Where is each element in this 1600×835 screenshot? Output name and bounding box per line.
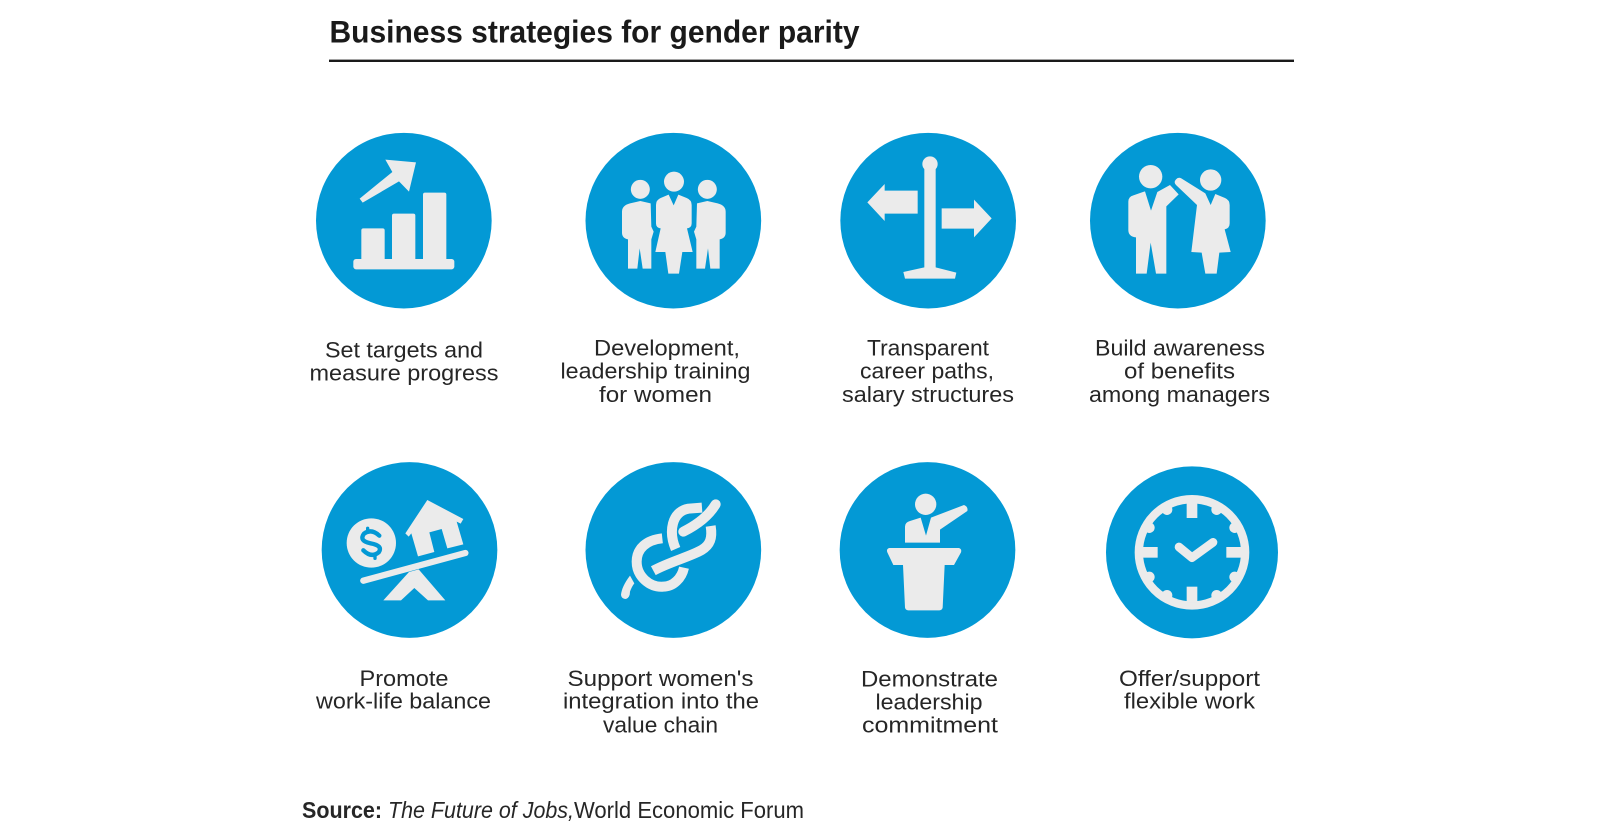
label: set targets: measure progress [310,360,498,386]
label: work-life balance: Promote [360,666,448,691]
label: work-life balance [315,666,491,714]
label: transparent career paths: Transparent [867,336,990,360]
panel: set targets [310,133,498,386]
icon: three people [585,133,761,308]
panel: flexible work [1106,466,1278,714]
label: value chain: Support women's [568,666,754,691]
label: set targets: Set targets and [325,338,483,362]
source note [302,797,804,823]
icon: man and woman [1090,133,1266,308]
icon: seesaw with coin and house [322,462,497,638]
label: development: for women [599,382,712,407]
panel: work-life balance [315,462,497,714]
label: transparent career paths [842,336,1014,407]
panel: value chain [563,462,761,738]
icon: signpost [840,133,1016,308]
label: flexible work: flexible work [1124,688,1256,714]
label: leadership commitment: Demonstrate [861,666,998,692]
label: build awareness: of benefits [1124,358,1235,384]
label: development: leadership training [560,358,750,384]
label: transparent career paths: career paths, [860,358,994,384]
label: development: Development, [594,336,740,360]
panel: build awareness [1089,133,1270,407]
panel: leadership commitment [840,462,1015,738]
label: build awareness [1089,336,1270,407]
panel: transparent career paths [840,133,1016,407]
label: value chain [563,666,759,738]
source note: The Future of Jobs, [388,797,574,823]
label: leadership commitment: leadership [876,690,982,714]
label: flexible work: Offer/support [1119,666,1261,691]
label: set targets [310,338,498,386]
label: development [560,336,750,407]
title: Business strategies for gender parity [330,14,860,50]
label: build awareness: Build awareness [1095,336,1265,360]
label: value chain: integration into the [563,688,759,714]
label: value chain: value chain [603,712,718,738]
label: build awareness: among managers [1089,382,1270,407]
label: flexible work [1119,666,1261,714]
icon: speaker at podium [840,462,1015,638]
label: leadership commitment [861,666,999,738]
label: work-life balance: work-life balance [315,688,491,714]
icon: knotted chain [585,462,761,638]
panel: development [560,133,761,407]
icon: rising bar chart [316,133,492,308]
source note: Source: [302,797,382,823]
label: leadership commitment: commitment [862,712,999,738]
label: transparent career paths: salary structures [842,382,1014,407]
source note: World Economic Forum [574,797,804,823]
icon: clock [1106,466,1278,638]
